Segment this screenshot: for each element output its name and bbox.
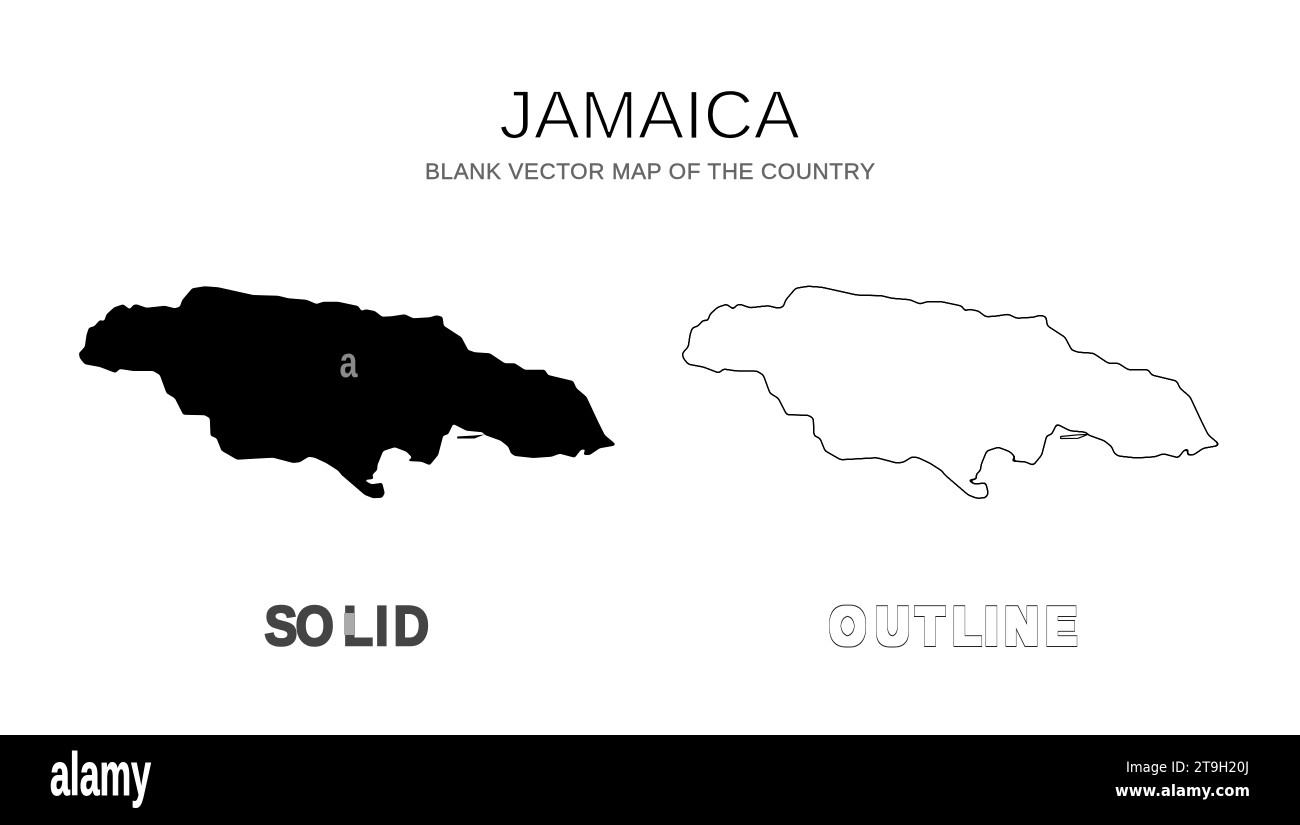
outline map of Jamaica	[682, 286, 1219, 498]
watermark patch on solid label	[344, 613, 354, 635]
solid map of Jamaica	[79, 286, 616, 498]
reef sliver outline	[1061, 434, 1088, 438]
title: JAMAICA	[499, 76, 800, 154]
reef sliver	[457, 434, 484, 438]
footer bar	[0, 735, 1300, 825]
website: www.alamy.com	[1115, 781, 1250, 800]
subtitle: BLANK VECTOR MAP OF THE COUNTRY	[425, 159, 875, 184]
watermark letter on solid map: a	[340, 338, 358, 387]
outline label: OUTLINE	[830, 598, 1076, 656]
image id: Image ID: 2T9H20J	[1126, 760, 1249, 776]
solid label: SOLID	[265, 595, 429, 658]
footer logo: alamy	[50, 741, 151, 808]
